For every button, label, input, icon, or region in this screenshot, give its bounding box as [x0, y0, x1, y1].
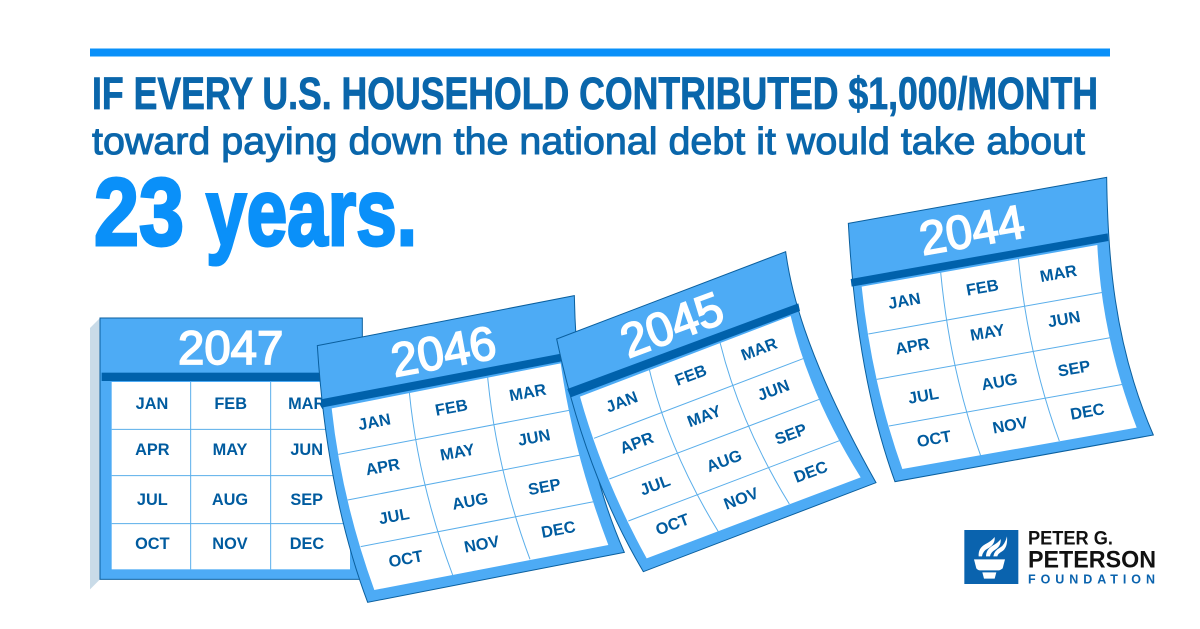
month grid: JUL — [377, 505, 411, 528]
month grid: JUL — [137, 491, 168, 509]
month grid — [862, 245, 1137, 469]
big number: 23 years: 23 — [94, 159, 184, 266]
month grid: MAY — [439, 441, 476, 465]
month grid: FEB — [214, 395, 247, 413]
month grid — [112, 382, 350, 569]
month grid: FEB — [434, 396, 469, 420]
dark header band — [102, 373, 362, 381]
month grid: SEP — [527, 475, 562, 499]
calendar: 2046 — [317, 296, 624, 602]
month grid: AUG — [451, 489, 490, 514]
logo: Peter G. Peterson Foundation — [964, 528, 1156, 586]
month grid: JAN — [887, 290, 922, 313]
month grid: APR — [894, 335, 931, 359]
month grid: SEP — [290, 491, 323, 509]
logo text: Peterson: PETERSON — [1028, 546, 1156, 574]
calendar sheet — [557, 252, 876, 572]
month grid: MAR — [288, 395, 325, 413]
big number: 23 years — [94, 159, 417, 266]
month grid: OCT — [916, 427, 953, 451]
month grid: AUG — [980, 370, 1019, 394]
calendar sheet — [100, 318, 362, 579]
month grid: DEC — [540, 518, 577, 542]
month grid: FEB — [672, 361, 710, 390]
month grid: OCT — [653, 510, 692, 539]
top rule — [90, 48, 1110, 56]
month grid: JUN — [516, 426, 552, 450]
month grid: JAN — [603, 388, 640, 416]
month grid: NOV — [722, 484, 761, 514]
subtitle: toward paying down the national debt it would take about — [92, 121, 1085, 163]
month grid: NOV — [463, 533, 501, 557]
month grid — [332, 363, 608, 590]
month grid: FEB — [965, 276, 1000, 300]
month grid: MAY — [969, 321, 1006, 345]
year label 2046: 2046 — [387, 316, 500, 388]
calendar sheet — [848, 177, 1153, 482]
logo text: Peter G.: PETER G. — [1028, 528, 1113, 550]
month grid: JUL — [638, 472, 673, 499]
month grid: JAN — [357, 410, 392, 434]
month grid: OCT — [387, 547, 424, 571]
month grid: MAY — [685, 402, 724, 431]
month grid: JUN — [755, 376, 792, 405]
year label 2045: 2045 — [614, 282, 731, 369]
month grid: JUN — [290, 441, 323, 459]
month grid: DEC — [1069, 400, 1106, 424]
calendar: 2047 — [90, 318, 362, 589]
month grid: MAR — [1039, 262, 1079, 286]
month grid: APR — [618, 429, 656, 458]
year label 2047: 2047 — [178, 322, 283, 375]
month grid — [580, 316, 861, 558]
calendar sheet — [317, 296, 624, 602]
month grid: JAN — [136, 395, 168, 413]
calendar: 2044 — [848, 177, 1153, 482]
logo text: Foundation: FOUNDATION — [1028, 572, 1155, 586]
calendar shadow — [90, 318, 100, 589]
month grid: APR — [364, 455, 402, 479]
month grid: JUL — [907, 385, 940, 408]
dark header band — [851, 233, 1108, 287]
icon: torch — [964, 530, 1018, 584]
month grid: DEC — [290, 535, 324, 553]
big number: 23 years: years. — [206, 159, 417, 266]
month grid: AUG — [212, 491, 248, 509]
dark header band — [321, 351, 576, 408]
month grid: MAR — [508, 381, 548, 405]
dark header band — [567, 303, 800, 397]
month grid: NOV — [212, 535, 248, 553]
month grid: MAR — [739, 335, 780, 365]
year label 2044: 2044 — [915, 196, 1028, 266]
month grid: OCT — [135, 535, 170, 553]
month grid: SEP — [772, 420, 809, 449]
calendar: 2045 — [557, 252, 876, 572]
month grid: NOV — [991, 414, 1029, 438]
month grid: AUG — [704, 447, 744, 476]
month grid: MAY — [213, 441, 247, 459]
month grid: DEC — [792, 458, 830, 487]
month grid: APR — [135, 441, 170, 459]
month grid: SEP — [1056, 357, 1092, 381]
month grid: JUN — [1046, 308, 1082, 331]
